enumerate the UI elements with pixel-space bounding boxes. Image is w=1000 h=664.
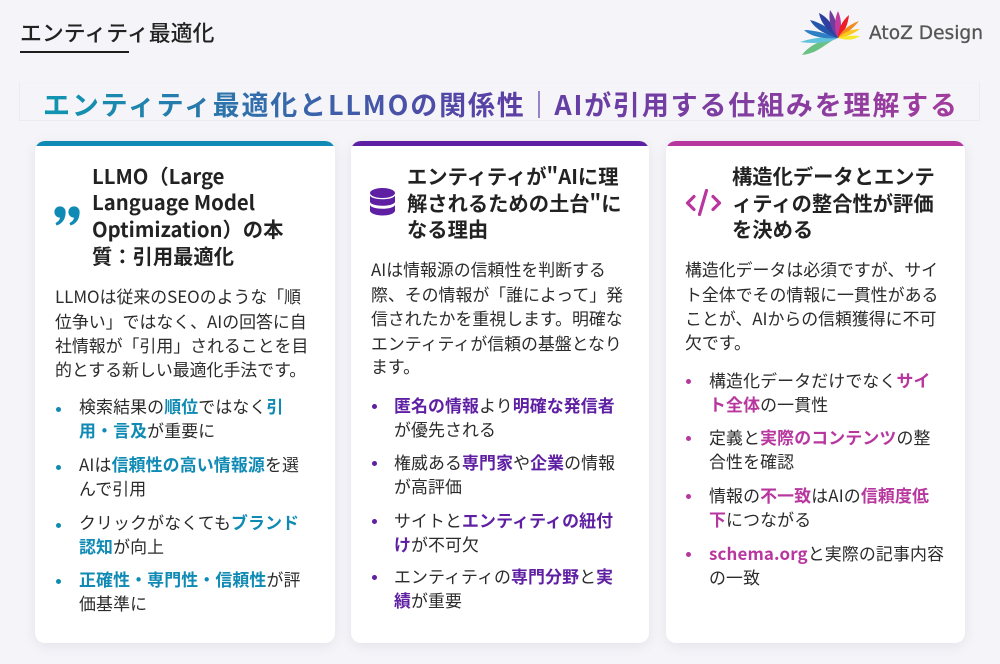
bullet list: が高評価 (394, 473, 462, 498)
panel: entity (351, 141, 649, 643)
bullet list: 績が重要 (394, 587, 462, 612)
icon: code (686, 188, 722, 216)
bullet list: 合性を確認 (709, 448, 794, 473)
body text: エンティティが信頼の基盤となり (371, 330, 622, 355)
bullet list: 定義と実際のコンテンツの整 (709, 424, 931, 449)
heading: 解されるための土台"に (407, 187, 622, 217)
body text (685, 256, 938, 354)
page label: エンティティ最適化 (20, 17, 214, 48)
panel: LLMO (35, 141, 335, 643)
heading: 構造化データとエンテ (732, 160, 935, 190)
heading (92, 160, 284, 270)
icon: logo petals (800, 10, 860, 55)
logo (800, 10, 983, 55)
bullet list: 情報の不一致はAIの信頼度低 (709, 482, 929, 507)
heading: LLMO（Large (92, 160, 224, 190)
bullet list: クリックがなくてもブランド (79, 509, 299, 534)
heading: ィティの整合性が評価 (732, 187, 934, 217)
title box (19, 82, 980, 121)
page label underline (20, 51, 129, 53)
bullet list: の一致 (709, 564, 760, 589)
body text (371, 256, 623, 378)
panel: structured data (666, 141, 965, 643)
heading: 質：引用最適化 (92, 240, 234, 270)
body text: 構造化データは必須ですが、サイ (685, 256, 938, 281)
bullet list: 用・言及が重要に (79, 417, 215, 442)
bullet list: が優先される (394, 416, 496, 441)
heading: Optimization）の本 (92, 213, 283, 243)
body text (55, 283, 308, 381)
body text: ます。 (371, 353, 420, 378)
body text: ことが、AIからの信頼獲得に不可 (685, 305, 936, 330)
body text: 的とする新しい最適化手法です。 (55, 356, 306, 381)
bullet list: ト全体の一貫性 (709, 391, 828, 416)
logo wordmark: AtoZ Design (869, 22, 983, 44)
bullet list: AIは信頼性の高い情報源を選 (79, 451, 299, 476)
bullet list: 権威ある専門家や企業の情報 (394, 449, 615, 474)
bullet list: schema.orgと実際の記事内容 (709, 540, 944, 565)
icon: quote (54, 206, 80, 226)
heading: エンティティが"AIに理 (407, 160, 618, 190)
body text: 位争い」ではなく、AIの回答に自 (55, 308, 307, 333)
heading: なる理由 (407, 213, 488, 243)
bullet list: 正確性・専門性・信頼性が評 (79, 566, 301, 591)
icon: database (370, 188, 395, 216)
heading (407, 160, 622, 243)
bullet list (686, 367, 944, 589)
body text: 際、その情報が「誰によって」発 (371, 281, 623, 306)
bullet list: 下につながる (709, 506, 811, 531)
body text: 信されたかを重視します。明確な (371, 305, 623, 330)
bullet list: んで引用 (79, 475, 146, 500)
bullet list: 価基準に (79, 590, 147, 615)
body text: ト全体でその情報に一貫性がある (685, 281, 938, 306)
heading: Language Model (92, 186, 255, 216)
body text: 社情報が「引用」されることを目 (55, 332, 308, 357)
bullet list: 検索結果の順位ではなく引 (79, 393, 284, 418)
bullet list: サイトとエンティティの紐付 (394, 507, 613, 532)
bullet list: 匿名の情報より明確な発信者 (394, 392, 615, 417)
heading (732, 160, 935, 243)
body text: LLMOは従来のSEOのような「順 (55, 283, 301, 308)
bullet list: エンティティの専門分野と実 (394, 563, 613, 588)
bullet list: 構造化データだけでなくサイ (709, 367, 931, 392)
body text: AIは情報源の信頼性を判断する (371, 256, 606, 281)
bullet list (372, 392, 615, 612)
body text: 欠です。 (685, 329, 751, 354)
bullet list (56, 393, 301, 615)
bullet list: 認知が向上 (79, 533, 164, 558)
heading: を決める (732, 213, 813, 243)
bullet list: けが不可欠 (394, 531, 479, 556)
